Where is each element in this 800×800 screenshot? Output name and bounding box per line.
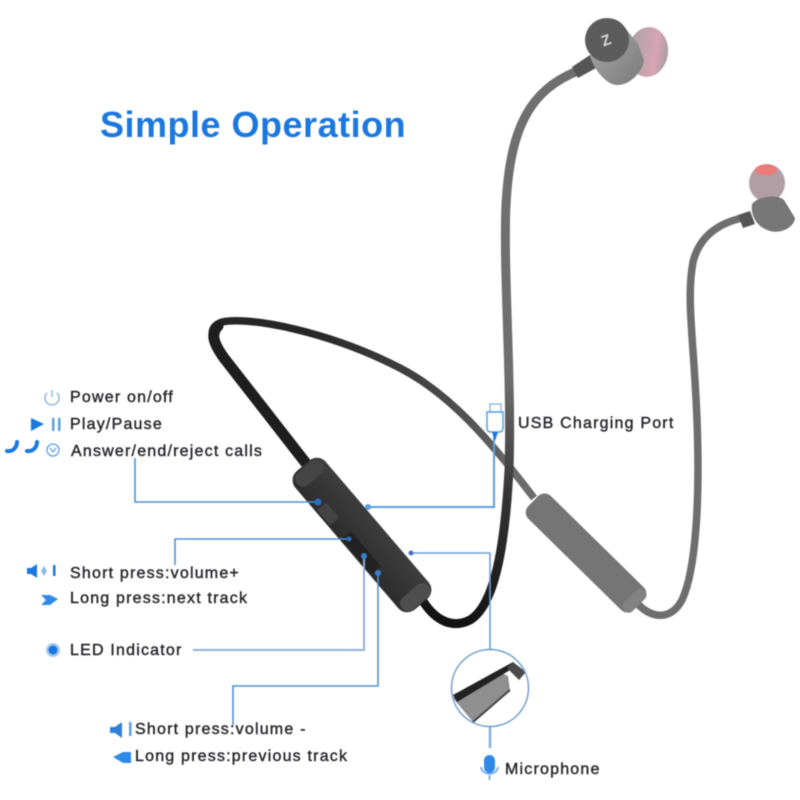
left cable to left earbud [420,70,580,624]
left earbud: Z [599,31,613,50]
microphone detail circle [452,650,528,726]
title: Simple Operation [100,104,406,145]
right earbud [738,164,795,232]
label: power on/off: Power on/off [70,389,174,406]
left earbud [572,18,671,85]
label: led indicator: LED Indicator [70,642,183,659]
leader lines [135,436,494,748]
label: long press next track: Long press:next track [70,590,248,607]
label: usb charging port: USB Charging Port [518,415,674,432]
label: long press previous track: Long press:previous track [135,748,348,765]
label: short press volume down: Short press:volume - [135,721,307,738]
right cable to right earbud [636,218,742,615]
label: microphone [481,755,601,780]
label: short press volume up: Short press:volume+ [70,565,240,582]
right control box [522,490,650,616]
label: play/pause: Play/Pause [70,416,163,433]
label: answer/end/reject calls: Answer/end/reject calls [71,443,263,460]
neckband cable [212,321,534,498]
label: usb charging port [487,404,674,441]
left control box [288,453,436,617]
label: microphone: Microphone [505,761,601,778]
headset [212,18,795,624]
